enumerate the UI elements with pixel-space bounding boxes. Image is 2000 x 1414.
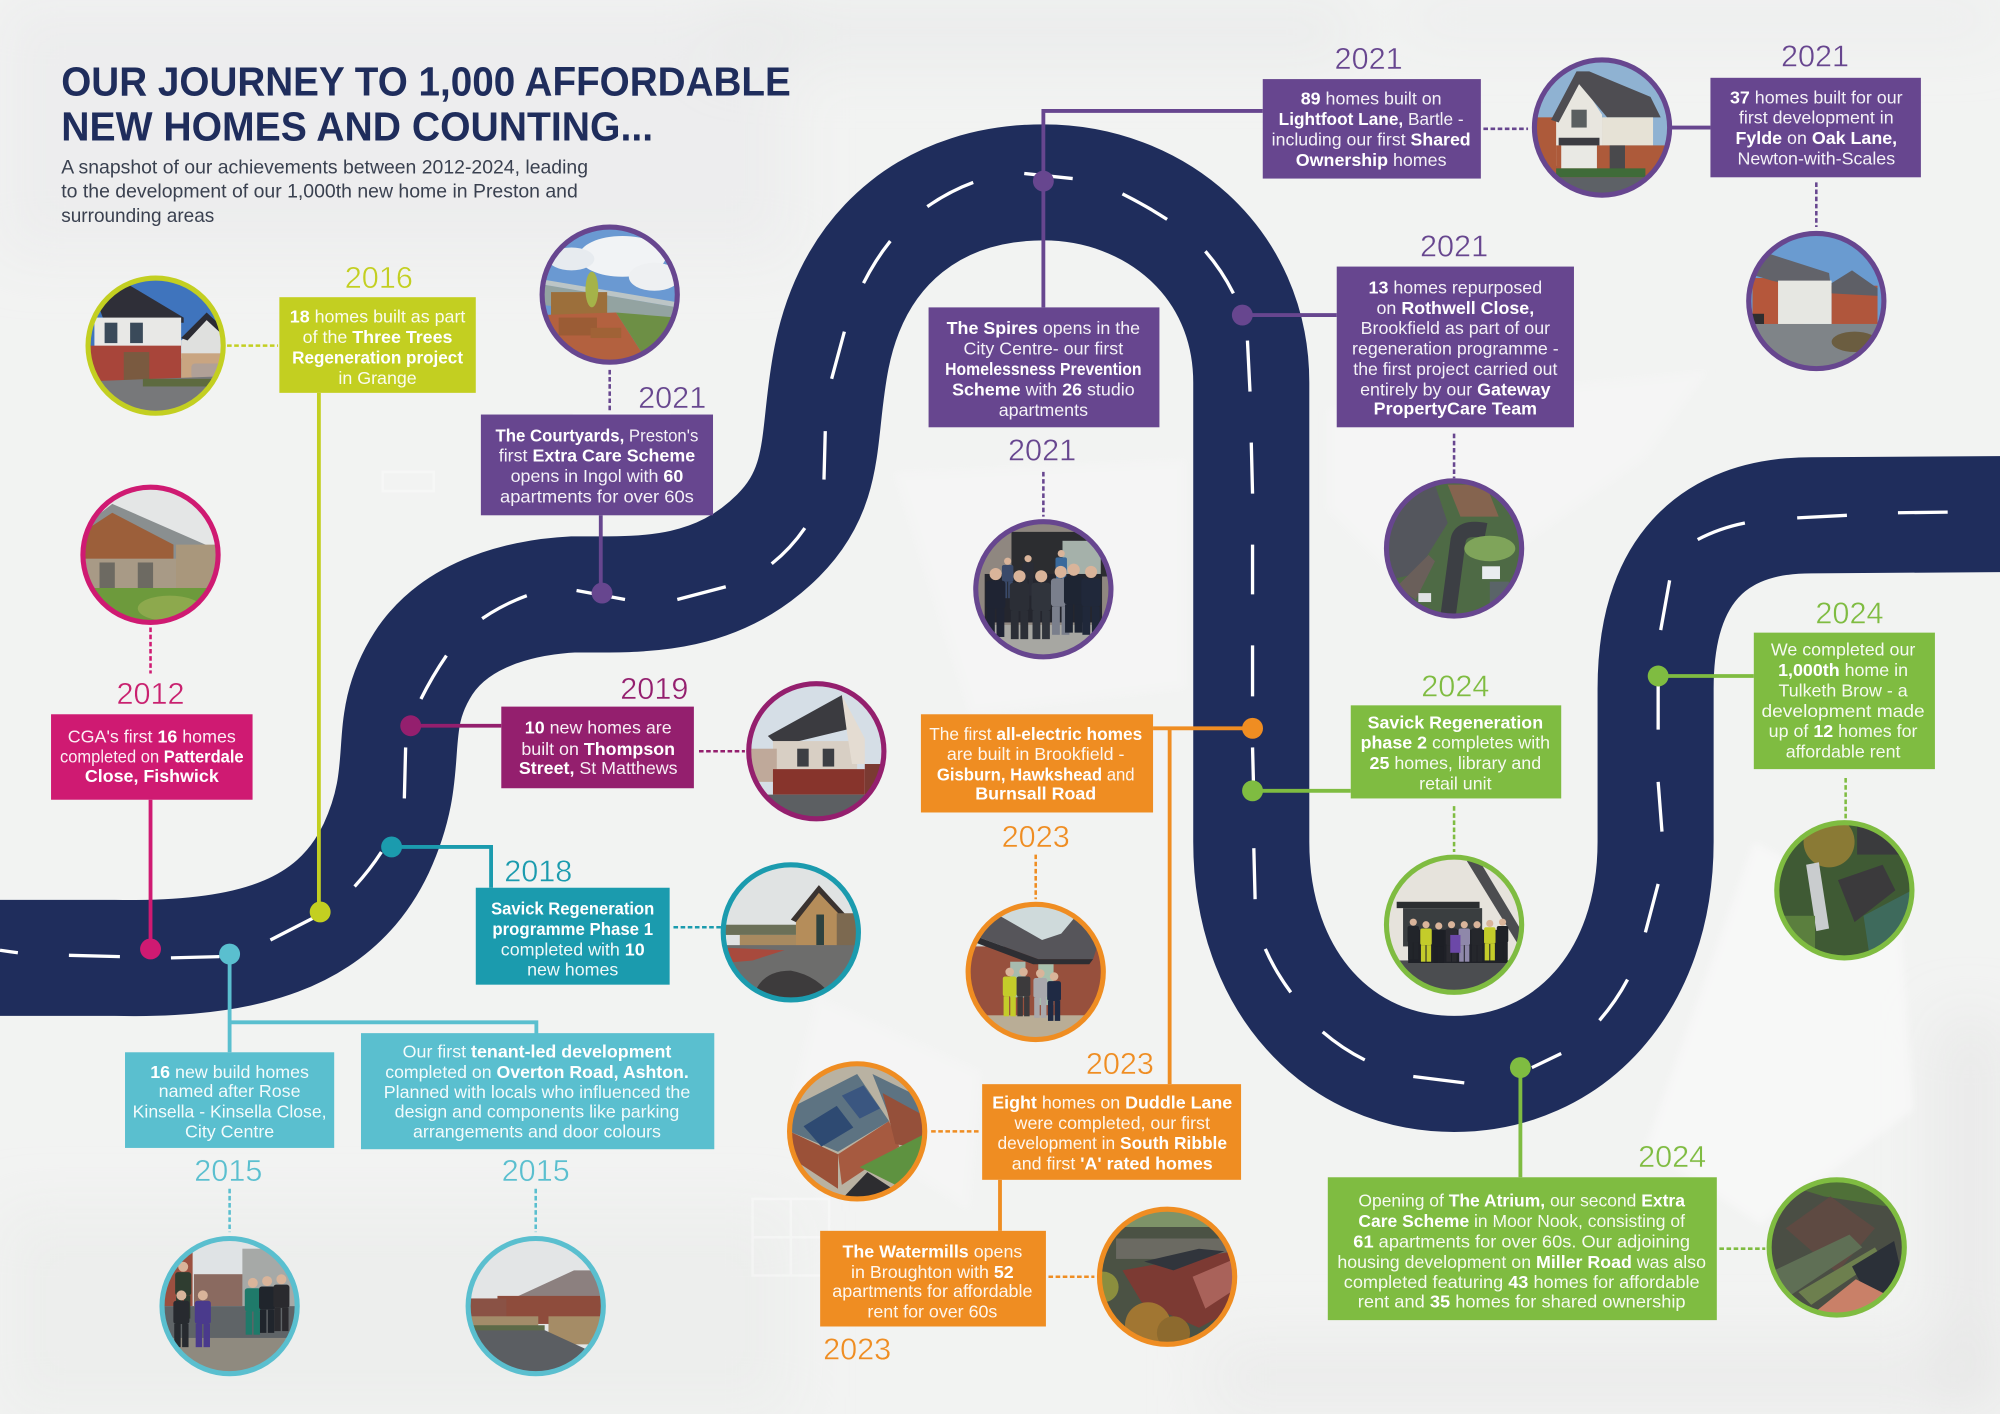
photo: Oak Lane houses	[1749, 233, 1884, 371]
callout: Savick phase 1	[476, 888, 670, 985]
milestone: 2023 all-electric homes	[921, 714, 1263, 1084]
callout: Rothwell Close: the first project carried out	[1353, 359, 1557, 379]
year 2012: 2012	[116, 677, 185, 711]
callout: Thompson Street: Street, St Matthews	[519, 758, 678, 778]
callout: Lightfoot Lane: including our first Shared	[1272, 129, 1471, 149]
milestone: 2024 Savick phase 2	[1242, 669, 1561, 994]
callout: Rothwell Close: entirely by our Gateway	[1360, 379, 1551, 399]
callout: Rothwell Close: PropertyCare Team	[1374, 399, 1537, 419]
callout: Rothwell Close: regeneration programme -	[1352, 339, 1559, 359]
callout: Overton Road: arrangements and door colours	[413, 1122, 661, 1142]
callout: Rothwell Close: on Rothwell Close,	[1377, 298, 1534, 318]
callout: The Spires	[929, 307, 1159, 427]
milestone: 2016 Three Trees	[88, 261, 476, 922]
year 2021: 2021	[1008, 433, 1076, 467]
callout: Duddle Lane	[982, 1084, 1241, 1180]
callout: The Spires: Homelessness Prevention	[945, 359, 1142, 379]
callout: 2012: Close, Fishwick	[85, 766, 219, 786]
callout: Three Trees: in Grange	[338, 368, 417, 388]
photo: Duddle Lane solar roofs	[790, 1064, 925, 1199]
callout: Thompson Street	[501, 707, 694, 788]
callout: Duddle Lane: Eight homes on Duddle Lane	[992, 1092, 1232, 1112]
milestone: 2018 Savick phase 1	[381, 836, 858, 1003]
callout: all-electric homes	[921, 714, 1153, 812]
callout: Tulketh Brow	[1754, 633, 1935, 769]
milestone: 2023 The Watermills	[820, 1209, 1235, 1367]
callout: Kinsella Close: 16 new build homes	[150, 1062, 309, 1082]
callout: The Atrium: 61 apartments for over 60s. Our adjoining	[1353, 1231, 1690, 1251]
title: OUR JOURNEY TO 1,000 AFFORDABLE	[61, 59, 791, 105]
callout: Overton Road: Our first tenant-led development	[403, 1041, 671, 1061]
milestone: 2021 The Spires	[929, 111, 1263, 658]
callout: The Atrium: housing development on Miller Road was also	[1337, 1252, 1706, 1272]
callout: all-electric homes: are built in Brookfield -	[947, 744, 1125, 764]
callout: The Spires: City Centre- our first	[964, 339, 1123, 359]
year 2023: 2023	[1002, 820, 1070, 854]
callout: 2012: CGA's first 16 homes	[68, 726, 236, 746]
callout: Lightfoot Lane: Ownership homes	[1296, 150, 1447, 170]
callout: Kinsella Close: named after Rose	[159, 1081, 301, 1101]
callout: Tulketh Brow: affordable rent	[1786, 742, 1901, 762]
milestone: 2021 Oak Lane	[1671, 39, 1921, 371]
callout: The Atrium: Opening of The Atrium, our second Extra	[1358, 1191, 1686, 1211]
subtitle text: surrounding areas	[61, 205, 214, 227]
callout: Tulketh Brow: 1,000th home in	[1778, 660, 1908, 680]
callout: The Courtyards	[481, 415, 713, 515]
callout: all-electric homes: Burnsall Road	[975, 784, 1096, 804]
photo: Savick phase 2 group	[1386, 857, 1522, 994]
year 2021: 2021	[638, 381, 706, 415]
photo: Thompson Street houses	[749, 684, 884, 823]
callout: Duddle Lane: development in South Ribble	[997, 1133, 1227, 1153]
year 2021: 2021	[1781, 39, 1849, 73]
callout: The Spires: The Spires opens in the	[947, 318, 1140, 338]
milestone: 2021 Lightfoot Lane	[1263, 42, 1670, 198]
milestone: 2021 Rothwell Close	[1232, 229, 1574, 619]
callout: The Spires: apartments	[999, 400, 1088, 420]
year 2021: 2021	[1420, 229, 1488, 263]
photo: Grange homes	[88, 278, 223, 416]
callout: The Spires: Scheme with 26 studio	[952, 379, 1135, 399]
callout: Kinsella Close: City Centre	[185, 1122, 274, 1142]
photo: Patterdale Close homes	[83, 487, 223, 626]
year 2015: 2015	[502, 1154, 570, 1188]
title	[61, 59, 791, 149]
callout: Three Trees: of the Three Trees	[303, 327, 453, 347]
callout: The Watermills: The Watermills opens	[842, 1242, 1022, 1262]
callout: The Courtyards: first Extra Care Scheme	[499, 446, 695, 466]
callout: Oak Lane: first development in	[1739, 108, 1894, 128]
photo: Rothwell Close aerial	[1386, 481, 1522, 619]
year 2023: 2023	[1086, 1047, 1154, 1081]
callout: Lightfoot Lane: 89 homes built on	[1301, 89, 1442, 109]
callout: Savick phase 2: 25 homes, library and	[1370, 753, 1541, 773]
callout: Tulketh Brow: up of 12 homes for	[1769, 721, 1918, 741]
milestone: 2015 Kinsella Close	[125, 944, 536, 1376]
milestone: 2021 The Courtyards	[481, 227, 713, 604]
callout: Lightfoot Lane: Lightfoot Lane, Bartle -	[1279, 109, 1464, 129]
callout: Three Trees	[279, 297, 476, 393]
callout: Thompson Street: built on Thompson	[521, 739, 675, 759]
callout: Savick phase 1: Savick Regeneration	[491, 899, 654, 919]
milestone: 2024 The Atrium and Miller Road	[1328, 1057, 1904, 1320]
photo: Tulketh Brow aerial	[1777, 816, 1912, 958]
photo: Kinsella Close group	[162, 1238, 297, 1376]
callout: The Watermills: rent for over 60s	[867, 1302, 997, 1322]
callout: The Atrium: rent and 35 homes for shared ownership	[1358, 1291, 1686, 1311]
photo: The Watermills aerial	[1088, 1209, 1235, 1349]
callout: Oak Lane	[1710, 78, 1921, 177]
callout: Overton Road: Planned with locals who influenced the	[384, 1082, 690, 1102]
callout: Lightfoot Lane	[1263, 79, 1481, 179]
callout: Oak Lane: 37 homes built for our	[1730, 87, 1903, 107]
callout: Rothwell Close	[1337, 267, 1574, 427]
milestone: 2023 Duddle Lane	[790, 1047, 1241, 1231]
callout: Three Trees: 18 homes built as part	[290, 307, 465, 327]
callout: Duddle Lane: and first 'A' rated homes	[1012, 1154, 1213, 1174]
callout: 2012: completed on Patterdale	[60, 747, 244, 767]
subtitle text	[61, 156, 588, 227]
callout: Savick phase 1: programme Phase 1	[492, 919, 653, 939]
milestone: 2019 Thompson Street	[400, 672, 884, 823]
callout: The Courtyards: apartments for over 60s	[500, 487, 694, 507]
year 2016: 2016	[345, 261, 413, 295]
milestone: 2015 Overton Road	[361, 1033, 714, 1376]
callout: The Watermills: in Broughton with 52	[851, 1262, 1014, 1282]
year 2023: 2023	[823, 1333, 891, 1367]
callout: Savick phase 1: completed with 10	[501, 939, 645, 959]
callout: The Atrium: Care Scheme in Moor Nook, consisting of	[1358, 1211, 1685, 1231]
callout: Tulketh Brow: Tulketh Brow - a	[1778, 680, 1908, 700]
callout: Duddle Lane: were completed, our first	[1014, 1113, 1210, 1133]
milestone: 2012 Patterdale Close	[51, 487, 253, 959]
year 2024: 2024	[1421, 669, 1489, 703]
callout: Kinsella Close	[125, 1052, 334, 1148]
milestone: 2024 Tulketh Brow	[1648, 597, 1935, 958]
callout: Thompson Street: 10 new homes are	[525, 717, 672, 737]
year 2015: 2015	[194, 1154, 262, 1188]
title: NEW HOMES AND COUNTING...	[61, 103, 653, 149]
callout: Overton Road	[361, 1033, 714, 1149]
photo: Overton Road bungalows	[468, 1238, 603, 1376]
callout: Savick phase 2: Savick Regeneration	[1368, 712, 1543, 732]
callout: The Atrium	[1328, 1177, 1717, 1320]
photo: Savick houses	[723, 865, 858, 1003]
callout: Savick phase 2: retail unit	[1419, 774, 1492, 794]
callout: all-electric homes: The first all-electric homes	[929, 724, 1142, 744]
year 2024: 2024	[1638, 1140, 1706, 1174]
callout: 2012	[51, 714, 253, 800]
callout: The Atrium: completed featuring 43 homes for affordable	[1344, 1272, 1700, 1292]
callout: Tulketh Brow: development made	[1761, 701, 1925, 721]
photo: The Spires group	[976, 522, 1114, 658]
callout: The Courtyards: The Courtyards, Preston's	[496, 425, 698, 445]
year 2019: 2019	[620, 672, 688, 706]
photo: Lightfoot Lane houses	[1534, 60, 1670, 198]
callout: Oak Lane: Newton-with-Scales	[1737, 149, 1895, 169]
callout: Kinsella Close: Kinsella - Kinsella Close,	[133, 1101, 327, 1121]
callout: Oak Lane: Fylde on Oak Lane,	[1735, 128, 1897, 148]
subtitle text: A snapshot of our achievements between 2012-2024, leading	[61, 156, 588, 178]
callout: Rothwell Close: Brookfield as part of our	[1361, 318, 1550, 338]
subtitle text: to the development of our 1,000th new home in Preston and	[61, 181, 578, 203]
callout: Tulketh Brow: We completed our	[1771, 640, 1915, 660]
callout: The Courtyards: opens in Ingol with 60	[511, 466, 683, 486]
year 2024: 2024	[1815, 597, 1884, 631]
callout: The Watermills	[820, 1231, 1046, 1327]
callout: Savick phase 2	[1351, 705, 1561, 798]
year 2018: 2018	[504, 854, 572, 888]
callout: Savick phase 2: phase 2 completes with	[1361, 733, 1550, 753]
photo: Miller Road aerial	[1769, 1180, 1904, 1318]
winding road	[0, 173, 2000, 1083]
callout: The Watermills: apartments for affordable	[832, 1281, 1033, 1301]
callout: Three Trees: Regeneration project	[292, 348, 463, 368]
photo: Brookfield bungalow	[968, 904, 1103, 1041]
year 2021: 2021	[1335, 42, 1403, 76]
photo: The Courtyards	[542, 227, 680, 362]
callout: Overton Road: design and components like parking	[395, 1101, 679, 1121]
callout: all-electric homes: Gisburn, Hawkshead and	[937, 765, 1135, 785]
callout: Rothwell Close: 13 homes repurposed	[1369, 277, 1542, 297]
callout: Savick phase 1: new homes	[527, 960, 618, 980]
callout: Overton Road: completed on Overton Road, Ashton.	[385, 1062, 689, 1082]
